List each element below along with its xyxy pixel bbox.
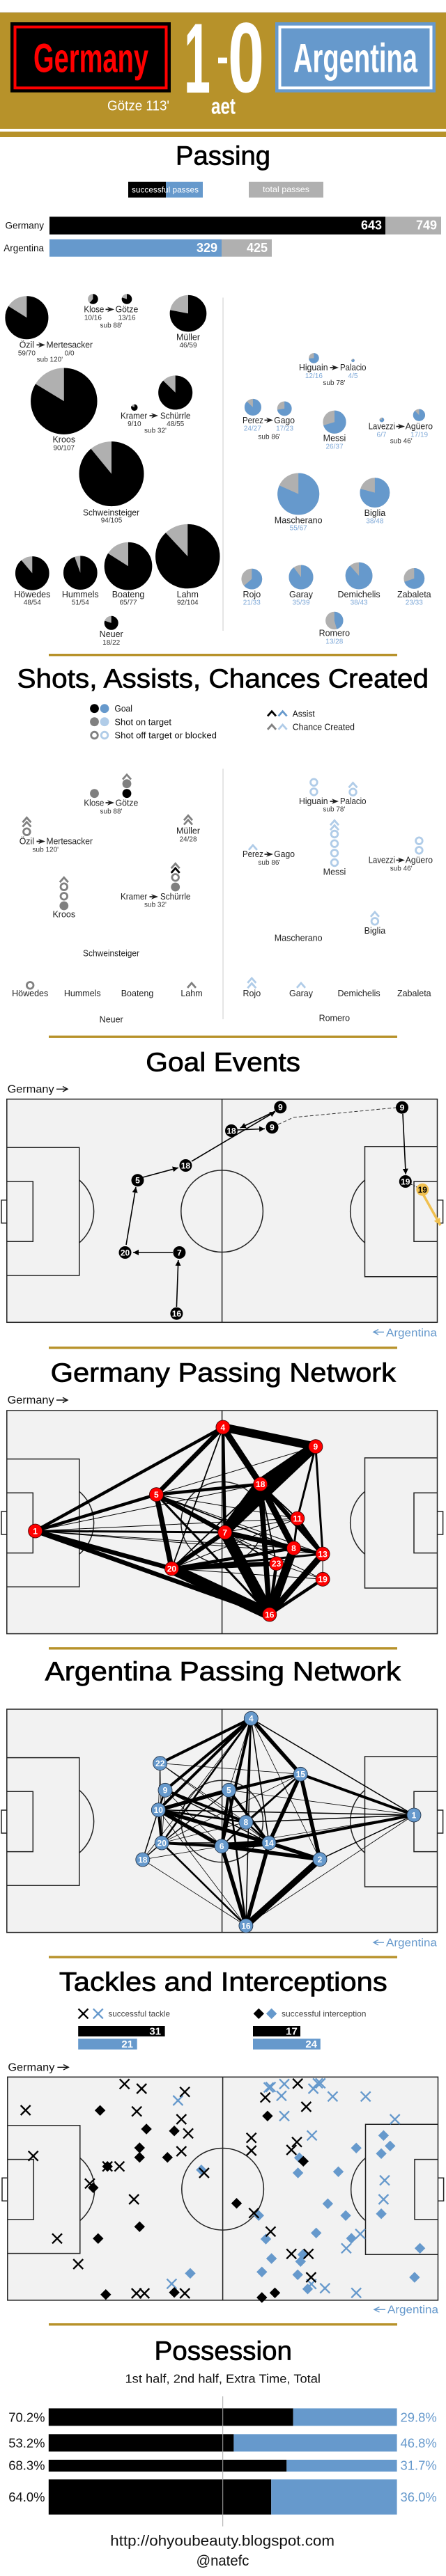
panel: Argentina shots and chances: Romero: [319, 1014, 350, 1023]
Argentina player nodes: 14: [264, 1838, 274, 1848]
shots legend: Shot off target or blocked: [114, 730, 217, 741]
panel: Germany passing pies: Lahm: [177, 590, 199, 599]
goalscorer: Götze 113': [107, 99, 169, 114]
panel: Germany passing pies: Müller: [176, 333, 200, 343]
panel: Germany passing pies: 92/104: [177, 599, 199, 606]
passing legend: successful passes: [132, 185, 199, 195]
Germany player nodes: 11: [293, 1514, 302, 1523]
assists legend: Chance Created: [293, 722, 355, 732]
Argentina player nodes: [136, 1711, 421, 1933]
panel: Argentina passing pies: 17/23: [276, 425, 294, 433]
panel: Germany passing pies: 48/55: [167, 421, 185, 428]
goal move players: 18: [226, 1126, 236, 1136]
direction label: Argentina: Argentina: [387, 2304, 438, 2316]
panel: Argentina passing pies: Messi: [323, 433, 346, 443]
panel: Argentina passing pies: 24/27: [244, 425, 261, 433]
panel: Argentina passing pies: Rojo: [243, 590, 261, 599]
goal move players: [118, 1101, 429, 1320]
panel: Germany passing pies: sub 88': [100, 322, 123, 329]
panel: Argentina passing pies: [241, 353, 433, 645]
pitch: tackles and interceptions: [2, 2077, 444, 2300]
tackles legend and bars: 31: [149, 2025, 161, 2037]
possession bars: 68.3%: [8, 2458, 45, 2473]
tackles legend and bars: [78, 2009, 170, 2050]
interceptions legend and bars: 17: [286, 2025, 298, 2037]
panel: Argentina passing pies: Biglia: [364, 508, 385, 518]
Argentina player nodes: 5: [226, 1786, 231, 1796]
panel: Germany passing pies: 10/16: [84, 314, 102, 322]
panel: Argentina passing pies: 38/43: [351, 599, 368, 606]
panel: Germany passing pies: Kroos: [52, 435, 75, 445]
panel: Argentina passing pies: 55/67: [290, 525, 307, 533]
panel: Argentina shots and chances: Rojo: [243, 989, 261, 998]
Argentina player nodes: 16: [241, 1921, 251, 1931]
scoreline: -: [217, 29, 229, 84]
goal move players: 19: [418, 1185, 427, 1195]
panel: Argentina shots and chances: Mascherano: [275, 933, 323, 943]
goal move players: 16: [172, 1309, 181, 1319]
footer credits: http://ohyoubeauty.blogspot.com: [110, 2534, 334, 2550]
shots legend: Goal: [114, 703, 132, 714]
panel: Argentina passing pies: Gago: [274, 416, 295, 425]
panel: Germany passing pies: Hummels: [62, 590, 99, 599]
panel: Argentina shots and chances: Perez: [243, 849, 263, 859]
Germany player nodes: 4: [221, 1422, 226, 1432]
footer credits: @natefc: [197, 2553, 249, 2569]
Argentina passing lines: [143, 1718, 414, 1926]
panel: Germany passing pies: 9/10: [128, 421, 141, 428]
panel: Germany passing pies: Höwedes: [14, 590, 50, 599]
panel: Argentina passing pies: Lavezzi: [369, 422, 395, 432]
panel: Argentina shots and chances: Agüero: [406, 856, 433, 865]
Argentina player nodes: 15: [296, 1770, 305, 1780]
interceptions legend and bars: 24: [305, 2039, 318, 2050]
possession bars: 29.8%: [400, 2410, 437, 2424]
panel: Germany shots and chances: Lahm: [180, 989, 203, 998]
direction label: Germany: Germany: [8, 1395, 54, 1406]
passing bars: Argentina: [3, 243, 44, 253]
panel: Germany shots and chances: sub 88': [100, 808, 123, 815]
Germany player nodes: 5: [154, 1490, 159, 1500]
Argentina player nodes: 22: [155, 1759, 165, 1768]
possession bars: 46.8%: [400, 2435, 437, 2450]
panel: Germany passing pies: Kramer: [121, 411, 147, 421]
footer credits: [110, 2534, 334, 2569]
passing legend: total passes: [263, 184, 309, 194]
panel: Argentina passing pies: 12/16: [305, 372, 323, 380]
panel: Argentina shots and chances: [243, 779, 433, 1023]
panel: Argentina shots and chances: Messi: [323, 867, 346, 877]
panel: Germany passing pies: sub 120': [37, 356, 63, 364]
panel: Germany passing pies: 46/59: [179, 342, 197, 350]
goal move players: 9: [400, 1103, 405, 1113]
scoreline: 1: [184, 3, 210, 114]
tackles legend and bars: successful tackle: [108, 2009, 170, 2019]
tackles legend and bars: 21: [121, 2039, 133, 2050]
panel: Germany passing pies: 90/107: [54, 444, 75, 452]
panel: Germany passing pies: Özil: [20, 340, 34, 350]
panel: Argentina shots and chances: Garay: [289, 989, 314, 998]
goal move players: 9: [270, 1123, 275, 1133]
possession bars: 31.7%: [400, 2458, 437, 2473]
Argentina player nodes: 18: [138, 1855, 148, 1864]
title: Shots, Assists, Chances Created: Shots, Assists, Chances Created: [17, 664, 429, 693]
shots legend: [90, 703, 217, 741]
panel: Argentina passing pies: sub 86': [258, 433, 280, 441]
panel: Germany passing pies: Mertesacker: [46, 340, 93, 350]
goal move arrows: [126, 1108, 440, 1307]
goal move players: 7: [177, 1248, 182, 1257]
panel: Argentina passing pies: Zabaleta: [397, 590, 431, 599]
panel: Argentina passing pies: sub 78': [323, 379, 345, 387]
panel: Argentina passing pies: Romero: [319, 628, 350, 638]
Germany team box: [10, 22, 171, 93]
title: Possession: Possession: [155, 2337, 292, 2366]
panel: Argentina shots and chances: sub 78': [323, 806, 345, 814]
panel: Argentina shots and chances: Demichelis: [338, 989, 380, 998]
Argentina player nodes: 9: [163, 1786, 168, 1796]
panel: Germany shots and chances: Boateng: [121, 989, 153, 998]
direction label: Argentina: Argentina: [386, 1937, 437, 1949]
panel: Germany passing pies: Boateng: [112, 590, 144, 599]
goal move players: 19: [401, 1177, 410, 1186]
panel: Germany shots and chances: Müller: [176, 826, 200, 835]
Argentina interceptions: [185, 2130, 425, 2294]
panel: Argentina passing pies: 23/33: [406, 599, 423, 606]
goal move players: 9: [278, 1103, 283, 1113]
title: Germany Passing Network: Germany Passing Network: [51, 1358, 397, 1388]
goal move players: 18: [181, 1161, 190, 1170]
panel: Germany passing pies: Neuer: [100, 629, 123, 639]
possession bars: 53.2%: [8, 2435, 45, 2450]
panel: Germany passing pies: 0/0: [65, 350, 75, 357]
header band: [0, 3, 446, 137]
direction label: Argentina: Argentina: [386, 1327, 437, 1339]
Argentina team box: [275, 22, 436, 93]
assists legend: Assist: [293, 708, 315, 718]
Germany player nodes: 8: [291, 1544, 296, 1553]
possession bars: 36.0%: [400, 2490, 437, 2504]
title: Argentina Passing Network: Argentina Passing Network: [45, 1657, 401, 1686]
assists legend: [268, 708, 355, 732]
goal move players: 5: [135, 1176, 140, 1186]
panel: Germany shots and chances: Höwedes: [12, 989, 48, 998]
panel: Argentina passing pies: Garay: [289, 590, 314, 599]
panel: Germany shots and chances: Kramer: [121, 892, 147, 902]
Germany player nodes: 18: [256, 1479, 266, 1489]
panel: Argentina passing pies: Higuain: [299, 363, 328, 372]
panel: Argentina passing pies: 35/39: [292, 599, 310, 606]
panel: Argentina passing pies: Mascherano: [275, 516, 323, 526]
Germany player nodes: 9: [314, 1442, 318, 1452]
passing bars: [3, 217, 441, 257]
possession bars: [8, 2396, 437, 2527]
passing bars: 749: [416, 218, 437, 232]
pitch: Argentina network: [1, 1709, 443, 1933]
panel: Germany shots and chances: Schweinsteiger: [83, 948, 139, 958]
panel: Germany shots and chances: Hummels: [64, 989, 101, 998]
panel: Argentina passing pies: 6/7: [377, 431, 387, 439]
Argentina player nodes: 6: [220, 1841, 224, 1851]
panel: Germany passing pies: 94/105: [101, 517, 123, 525]
interceptions legend and bars: successful interception: [282, 2009, 367, 2019]
panel: Argentina passing pies: Agüero: [406, 422, 433, 432]
passing bars: 329: [197, 241, 217, 255]
panel: Germany shots and chances: Klose: [84, 798, 104, 808]
passing bars: 643: [361, 218, 382, 232]
panel: Germany shots and chances: Kroos: [52, 909, 75, 919]
panel: Argentina shots and chances: sub 46': [390, 865, 413, 873]
panel: Argentina passing pies: 21/33: [243, 599, 261, 606]
Germany player nodes: [29, 1420, 330, 1621]
panel: Germany passing pies: 48/54: [24, 599, 41, 606]
panel: Germany shots and chances: sub 32': [144, 902, 167, 909]
Argentina player nodes: 1: [412, 1810, 417, 1820]
panel: Argentina shots and chances: Higuain: [299, 796, 328, 806]
passing bars: Germany: [5, 220, 44, 230]
title: Goal Events: Goal Events: [146, 1048, 300, 1077]
panel: Germany passing pies: Götze: [116, 305, 138, 315]
panel: Germany passing pies: 59/70: [18, 350, 36, 357]
passing legend: [128, 182, 323, 198]
title: Passing: Passing: [176, 142, 270, 171]
interceptions legend and bars: [253, 2009, 367, 2050]
possession bars: 70.2%: [8, 2410, 45, 2424]
pitch: goal events: [1, 1099, 443, 1322]
Germany player nodes: 19: [318, 1575, 328, 1585]
panel: Germany shots and chances: sub 120': [33, 846, 59, 854]
panel: Argentina passing pies: sub 46': [390, 438, 413, 446]
after extra time: aet: [211, 93, 236, 118]
panel: Argentina passing pies: Perez: [243, 416, 263, 425]
panel: Argentina passing pies: 13/28: [325, 638, 344, 645]
panel: Argentina passing pies: 17/19: [410, 431, 429, 439]
possession subtitle: 1st half, 2nd half, Extra Time, Total: [125, 2372, 321, 2386]
panel: Germany shots and chances: [12, 775, 203, 1024]
Germany player nodes: 7: [222, 1527, 227, 1537]
panel: Germany shots and chances: Götze: [116, 798, 138, 808]
panel: Germany shots and chances: Mertesacker: [46, 837, 93, 847]
Argentina player nodes: 8: [244, 1818, 249, 1828]
possession bars: 64.0%: [8, 2490, 45, 2504]
panel: Germany shots and chances: 24/28: [179, 835, 197, 843]
panel: Germany passing pies: Schweinsteiger: [83, 508, 139, 518]
scoreline: [184, 3, 264, 114]
Argentina player nodes: 4: [249, 1714, 254, 1724]
panel: Germany passing pies: 65/77: [119, 599, 137, 606]
panel: Argentina shots and chances: Lavezzi: [369, 856, 395, 865]
Germany player nodes: 1: [33, 1526, 38, 1536]
panel: Argentina passing pies: Palacio: [340, 363, 367, 372]
panel: Germany passing pies: 18/22: [102, 639, 121, 647]
scoreline: 0: [228, 3, 264, 113]
Argentina player nodes: 20: [157, 1838, 167, 1848]
panel: Argentina passing pies: 4/5: [348, 372, 358, 380]
Germany interceptions: [88, 2105, 309, 2303]
panel: Argentina shots and chances: Palacio: [340, 796, 367, 806]
panel: Germany passing pies: Klose: [84, 305, 104, 315]
shots legend: Shot on target: [114, 716, 171, 727]
Germany player nodes: 13: [318, 1549, 328, 1559]
panel: Germany passing pies: [5, 294, 220, 647]
direction label: Germany: Germany: [8, 2061, 55, 2073]
title: Tackles and Interceptions: Tackles and Interceptions: [59, 1968, 387, 1997]
panel: Germany shots and chances: Özil: [20, 837, 34, 847]
panel: Argentina passing pies: 38/48: [366, 518, 384, 526]
Argentina player nodes: 2: [318, 1855, 323, 1864]
Germany tackles: [21, 2079, 316, 2298]
panel: Argentina shots and chances: Zabaleta: [397, 989, 431, 998]
panel: Germany passing pies: sub 32': [144, 427, 167, 434]
panel: Germany shots and chances: Neuer: [100, 1014, 123, 1024]
panel: Argentina shots and chances: Gago: [274, 849, 295, 859]
Germany player nodes: 20: [167, 1564, 176, 1573]
panel: Argentina shots and chances: Biglia: [364, 926, 385, 936]
panel: Germany passing pies: 51/54: [72, 599, 89, 606]
direction label: Germany: Germany: [8, 1083, 54, 1095]
Argentina player nodes: 10: [154, 1805, 163, 1815]
panel: Germany passing pies: 13/16: [118, 314, 136, 322]
Argentina tackles: [167, 2078, 400, 2298]
Germany team box: Germany: [33, 36, 148, 81]
pitch: Germany network: [1, 1411, 443, 1634]
goal move players: 20: [121, 1248, 130, 1257]
passing bars: 425: [247, 241, 268, 255]
panel: Argentina passing pies: Demichelis: [338, 590, 380, 599]
panel: Germany passing pies: Schürrle: [160, 411, 190, 421]
panel: Argentina passing pies: 26/37: [325, 443, 344, 451]
Germany player nodes: 23: [272, 1559, 282, 1569]
panel: Argentina shots and chances: sub 86': [258, 859, 280, 867]
Germany player nodes: 16: [265, 1610, 275, 1619]
Germany passing lines: [36, 1427, 323, 1615]
panel: Germany shots and chances: Schürrle: [160, 892, 190, 902]
